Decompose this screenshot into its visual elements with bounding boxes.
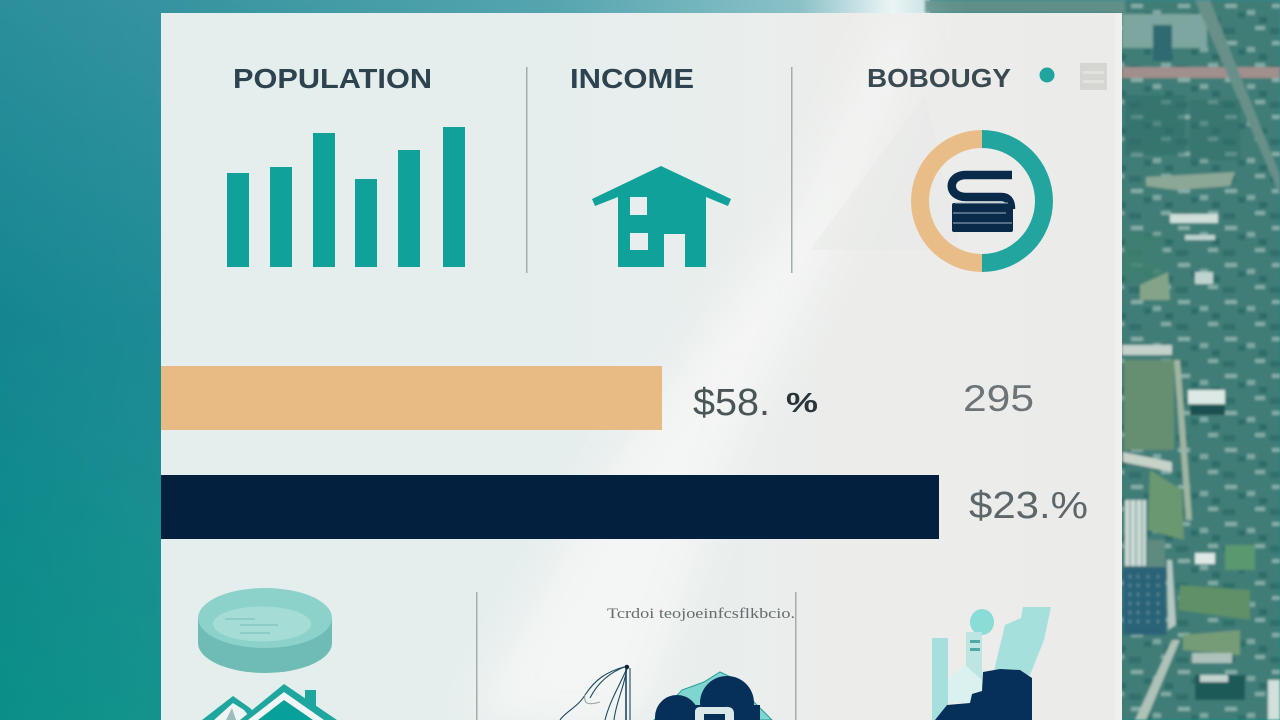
divider: top left [526, 67, 528, 273]
value: tan bar [693, 382, 818, 424]
divider: bottom right [795, 592, 796, 720]
bar: navy [161, 475, 939, 539]
value: tan bar: $58. [693, 382, 770, 424]
icon: house [592, 166, 731, 267]
caption: bottom middle: Tcrdoi teojoeinfcsflkbcio. [607, 606, 795, 622]
icon: sail [560, 665, 630, 720]
divider: top right [791, 67, 792, 273]
icon: cloud blob [654, 672, 772, 720]
icon: map figure [932, 607, 1051, 720]
background: aerial city photo [925, 0, 1280, 720]
heading: income: INCOME [570, 63, 694, 94]
donut chart with books icon [911, 130, 1053, 272]
divider: bottom left [476, 592, 478, 720]
value: second figure: 295 [963, 378, 1034, 419]
icon: teal dot [1040, 68, 1054, 82]
value: tan bar: % [786, 387, 818, 418]
panel: main white card [161, 13, 1122, 720]
heading: third column: BOBOUGY [867, 63, 1011, 93]
icon: coin [198, 588, 332, 673]
icon: grey square [1080, 63, 1107, 90]
icon: stacked books [952, 175, 1013, 232]
bar chart: population [227, 127, 465, 267]
bar: tan [161, 366, 662, 430]
icon: houses [202, 684, 337, 720]
heading: population: POPULATION [233, 63, 432, 94]
value: navy bar: $23.% [969, 485, 1088, 527]
